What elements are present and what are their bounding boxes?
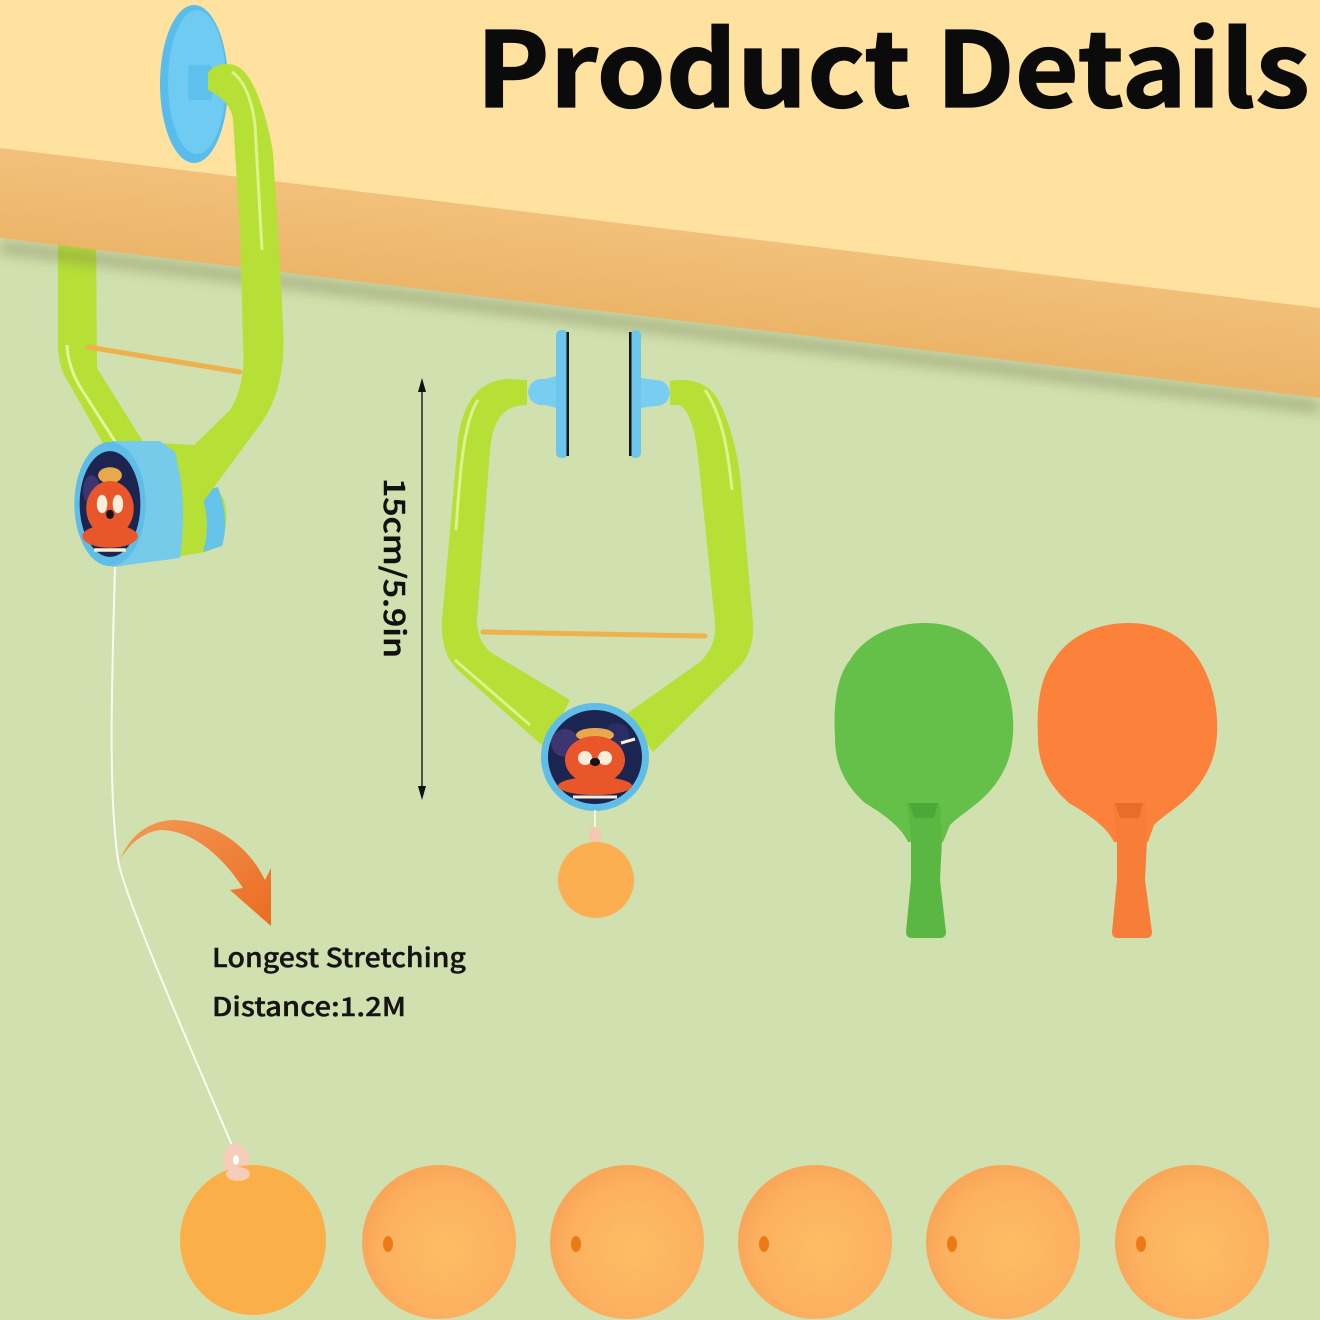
hook one: wall mounted with suction disc and reel bbox=[74, 5, 284, 567]
reel body bbox=[112, 441, 226, 567]
hanging ball with bead bbox=[558, 810, 634, 918]
ball 2 bbox=[362, 1165, 516, 1319]
row of orange balls bbox=[180, 1143, 1269, 1319]
stretching distance label bbox=[212, 938, 466, 1024]
ball 3 bbox=[550, 1165, 704, 1319]
hook one: rear arm passing behind the ledge bbox=[58, 235, 145, 452]
orange elastic bar bbox=[483, 632, 705, 636]
curved orange arrow bbox=[120, 820, 271, 926]
stretching distance label: Longest Stretching bbox=[212, 938, 466, 975]
curved green arm bbox=[177, 64, 284, 507]
orange elastic bar bbox=[88, 347, 240, 372]
ball 4 bbox=[738, 1165, 892, 1319]
green paddle bbox=[835, 623, 1013, 938]
wall and ledge bbox=[0, 0, 1320, 414]
hook two: front view with dimensions bbox=[375, 330, 753, 918]
ball 6 bbox=[1115, 1165, 1269, 1319]
right suction disc bbox=[629, 330, 670, 458]
reel tiger badge bbox=[74, 442, 146, 566]
tiger badge bbox=[541, 703, 649, 811]
left suction disc bbox=[528, 330, 569, 458]
ball 5 bbox=[926, 1165, 1080, 1319]
stretching distance label: Distance:1.2M bbox=[212, 987, 406, 1024]
height dimension arrow bbox=[418, 378, 426, 800]
right green arm bbox=[625, 380, 753, 752]
left green arm bbox=[442, 379, 570, 748]
icon: ball string bbox=[112, 565, 234, 1150]
ball with bead bbox=[180, 1143, 326, 1315]
suction disc bbox=[160, 5, 228, 163]
height label: 15cm/5.9in bbox=[375, 478, 417, 658]
orange paddle bbox=[1038, 623, 1217, 938]
